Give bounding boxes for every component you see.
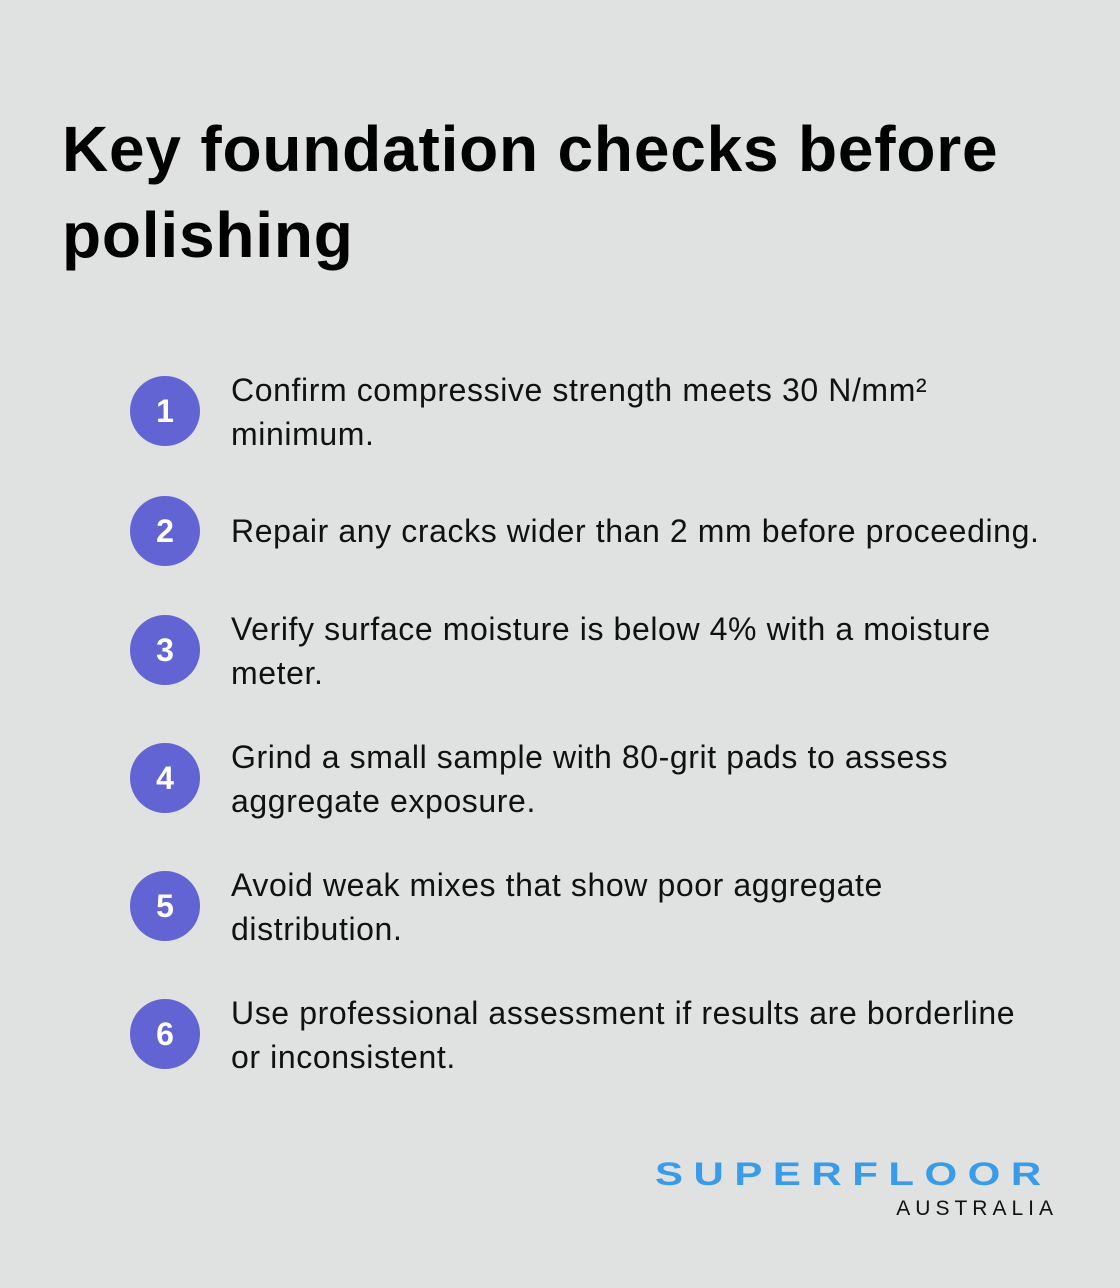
badge 5: 5 [156, 888, 174, 924]
text 6: Use professional assessment if results are borderline [231, 995, 1015, 1031]
title: polishing [62, 199, 354, 271]
badge 3 [130, 615, 200, 685]
text 6 [231, 995, 1015, 1075]
logo: AUSTRALIA [896, 1197, 1058, 1220]
item 2 [130, 496, 1039, 566]
text 2: Repair any cracks wider than 2 mm before proceeding. [231, 513, 1039, 549]
text 4: Grind a small sample with 80-grit pads to assess [231, 739, 948, 775]
badge 2 [130, 496, 200, 566]
item 5 [130, 867, 883, 947]
title: Key foundation checks before [62, 113, 998, 185]
text 4: aggregate exposure. [231, 783, 536, 819]
text 3: meter. [231, 655, 324, 691]
logo: SUPERFLOOR [655, 1155, 1052, 1192]
text 5 [231, 867, 883, 947]
logo [655, 1155, 1058, 1220]
badge 3: 3 [156, 632, 174, 668]
badge 6 [130, 999, 200, 1069]
text 3: Verify surface moisture is below 4% with a moisture [231, 611, 991, 647]
badge 4 [130, 743, 200, 813]
text 5: distribution. [231, 911, 402, 947]
text 3 [231, 611, 991, 691]
badge 5 [130, 871, 200, 941]
text 4 [231, 739, 948, 819]
badge 1 [130, 376, 200, 446]
badge 2: 2 [156, 513, 174, 549]
item 1 [130, 372, 927, 452]
title [62, 113, 998, 271]
badge 6: 6 [156, 1016, 174, 1052]
text 6: or inconsistent. [231, 1039, 456, 1075]
text 1 [231, 372, 927, 452]
text 1: Confirm compressive strength meets 30 N/mm² [231, 372, 927, 408]
item 3 [130, 611, 991, 691]
badge 1: 1 [156, 393, 174, 429]
item 6 [130, 995, 1015, 1075]
item 4 [130, 739, 948, 819]
text 5: Avoid weak mixes that show poor aggregate [231, 867, 883, 903]
badge 4: 4 [156, 760, 174, 796]
text 1: minimum. [231, 416, 374, 452]
